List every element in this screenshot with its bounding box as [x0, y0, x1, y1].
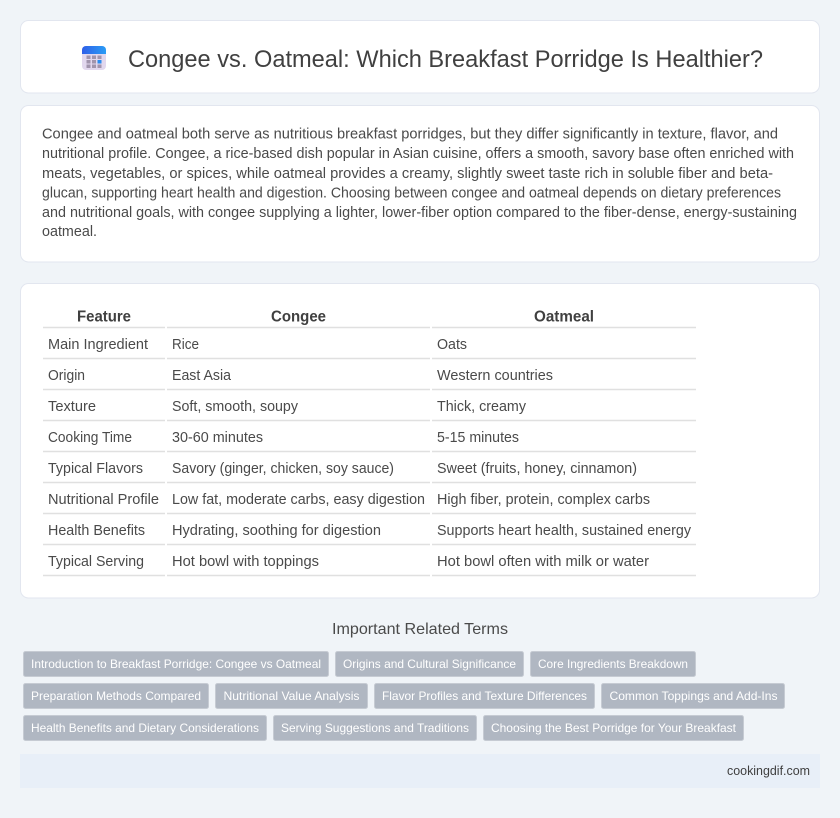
chip: Origins and Cultural Significance [343, 657, 516, 671]
table row: typical serving: Hot bowl with toppings [172, 554, 319, 570]
chip: Core Ingredients Breakdown [538, 657, 688, 671]
panel: introduction [20, 106, 820, 262]
table row: main ingredient: Main Ingredient [48, 337, 148, 353]
table header row: Feature [77, 308, 131, 326]
chip [274, 716, 476, 740]
table row: cooking time: Cooking Time [48, 430, 132, 446]
table row: typical flavors: Typical Flavors [48, 461, 143, 477]
chip [24, 716, 266, 740]
chip [484, 716, 744, 740]
table row: origin: Origin [48, 368, 85, 384]
related term chips [24, 652, 784, 740]
table row: nutritional profile: Low fat, moderate carbs, easy digestion [172, 492, 425, 508]
chip [24, 684, 208, 708]
chip: Introduction to Breakfast Porridge: Congee vs Oatmeal [31, 657, 321, 671]
table header row: Oatmeal [534, 308, 594, 326]
table row: texture: Thick, creamy [437, 399, 527, 415]
text block: introduction paragraph: oatmeal. [42, 224, 97, 240]
text block: introduction paragraph: meats, vegetables, or spices, while oatmeal provides a creamy, slightly sweet taste rich in soluble fiber and beta- [42, 166, 773, 182]
table row: texture [48, 399, 527, 415]
table row: health benefits: Supports heart health, sustained energy [437, 523, 692, 539]
table row: texture: Texture [48, 399, 96, 415]
chip [216, 684, 368, 708]
panel: comparison table [20, 284, 820, 598]
table row: health benefits: Hydrating, soothing for digestion [172, 523, 381, 539]
text block: introduction paragraph [42, 126, 797, 240]
table row: typical serving: Typical Serving [48, 554, 144, 570]
chip: Preparation Methods Compared [31, 689, 201, 703]
chip: Choosing the Best Porridge for Your Breakfast [491, 721, 737, 735]
footer [20, 754, 820, 788]
heading: important related terms: Important Related Terms [332, 621, 508, 638]
table row: origin: East Asia [172, 368, 232, 384]
table row: health benefits: Health Benefits [48, 523, 145, 539]
text block: introduction paragraph: Congee and oatmeal both serve as nutritious breakfast porridges, but they differ significantly in texture, flavor, and [42, 126, 778, 142]
text block: introduction paragraph: glucan, supporting heart health and digestion. Choosing between congee and oatmeal depends on dietary preferences [42, 186, 781, 202]
table row: texture: Soft, smooth, soupy [172, 399, 299, 415]
table row: nutritional profile [48, 492, 650, 508]
table row: typical flavors: Savory (ginger, chicken, soy sauce) [172, 461, 394, 477]
table row: typical serving: Hot bowl often with milk or water [437, 554, 649, 570]
table row: cooking time [48, 430, 519, 446]
panel: header [20, 20, 820, 93]
table row: main ingredient: Rice [172, 337, 199, 353]
chip: Nutritional Value Analysis [224, 689, 360, 703]
table row: main ingredient: Oats [437, 337, 467, 353]
table row: main ingredient [48, 337, 467, 353]
table row: nutritional profile: High fiber, protein, complex carbs [437, 492, 650, 508]
chip: Common Toppings and Add-Ins [610, 689, 778, 703]
chip [530, 652, 696, 676]
table row: health benefits [48, 523, 692, 539]
icon: calendar [82, 46, 106, 70]
table row: cooking time: 30-60 minutes [172, 430, 263, 446]
title: Congee vs. Oatmeal: Which Breakfast Porridge Is Healthier? [128, 46, 763, 73]
text block: introduction paragraph: and nutritional goals, with congee supplying a lighter, lower-fiber option compared to the fiber-dense, energy-sustaining [42, 205, 797, 221]
table row: cooking time: 5-15 minutes [437, 430, 519, 446]
table row: typical flavors: Sweet (fruits, honey, cinnamon) [437, 461, 637, 477]
table row: nutritional profile: Nutritional Profile [48, 492, 159, 508]
chip [336, 652, 524, 676]
chip: Health Benefits and Dietary Considerations [31, 721, 259, 735]
table header row [77, 308, 594, 326]
table row: typical flavors [48, 461, 637, 477]
table row: typical serving [48, 554, 649, 570]
table row: origin [48, 368, 553, 384]
table row: origin: Western countries [437, 368, 553, 384]
chip [24, 652, 328, 676]
chip [602, 684, 784, 708]
table header row: Congee [271, 308, 326, 326]
chip: Flavor Profiles and Texture Differences [382, 689, 587, 703]
footer source text: cookingdif.com [727, 764, 810, 778]
chip [374, 684, 594, 708]
chip: Serving Suggestions and Traditions [281, 721, 469, 735]
text block: introduction paragraph: nutritional profile. Congee, a rice-based dish popular in Asian cuisine, offers a smooth, savory base often enriched with [42, 146, 794, 162]
